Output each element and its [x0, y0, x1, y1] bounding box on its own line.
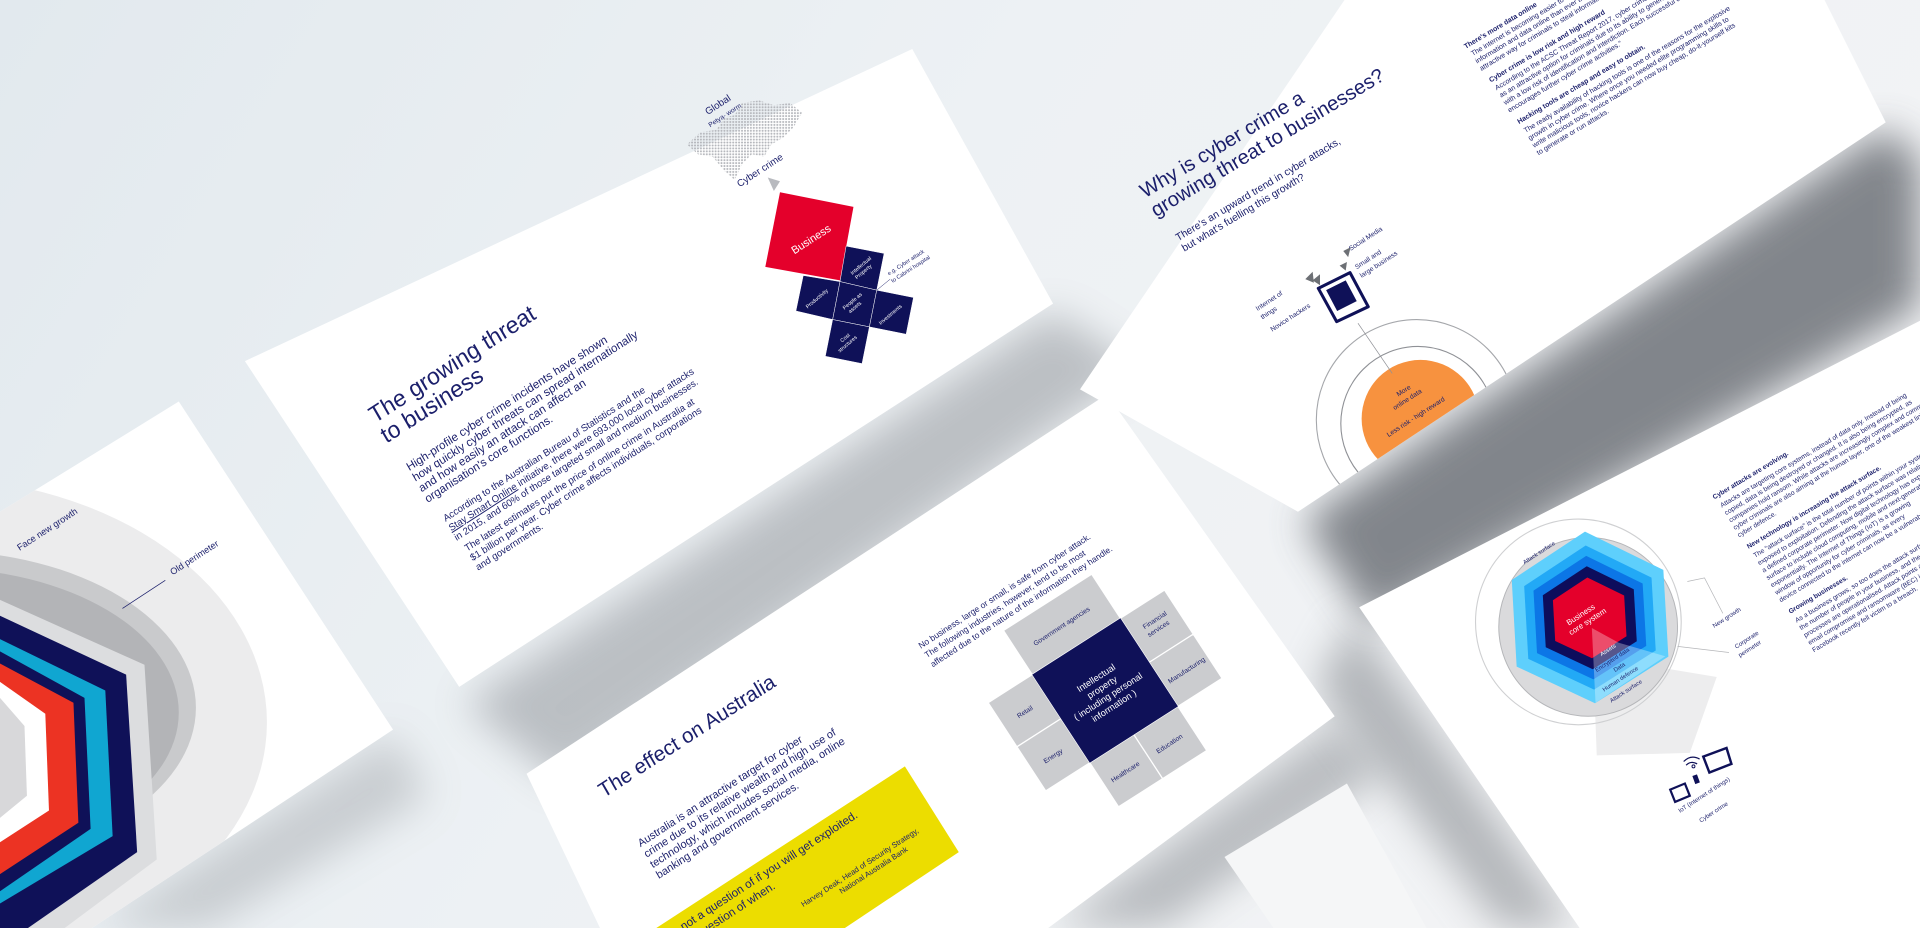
diagram: business cross: People as [842, 292, 864, 311]
callout: quote: National Australia Bank [838, 845, 909, 896]
text: industries intro: The following industries, however, tend to be most [922, 548, 1088, 660]
diagram: hexagon: Human defence [1602, 666, 1640, 693]
diagram: business cross: assets [848, 300, 863, 315]
labels [1255, 226, 1400, 333]
diagram: business cross: Cost [839, 332, 852, 344]
icon: devices: IoT (Internet of things) [1677, 776, 1731, 815]
icon: devices [1670, 748, 1731, 824]
panel: left hexagon slide [0, 402, 393, 928]
diagram: hexagon: Business [1565, 602, 1597, 627]
title and body: organisation's core functions. [423, 412, 555, 506]
diagram: business cross: Business [789, 222, 834, 257]
diagram: business cross [765, 192, 932, 364]
diagram: industries: Intellectual [1075, 662, 1117, 694]
diagram: hexagon: perimeter [1737, 639, 1763, 659]
diagram: industries: Retail [1016, 705, 1035, 720]
diagram: business cross: Property [854, 263, 874, 281]
title and body: crime due to its relative wealth and high use of [642, 726, 839, 860]
title and body: According to the Australian Bureau of Statistics and the [442, 385, 647, 524]
diagram: hexagon: Data [1613, 662, 1627, 674]
diagram: hexagon: Attack surface [1609, 679, 1644, 704]
diagram: industries: ( including personal [1072, 671, 1144, 722]
right text column [1712, 371, 1920, 659]
right text column: Cyber crime is low risk and high reward [1488, 8, 1607, 84]
title and body: technology, which includes social media, online [648, 735, 847, 871]
diagram: industries: Government agencies [1033, 606, 1092, 648]
title and body: and how easily an attack can affect an [416, 376, 588, 495]
map: global: Petya- worm [707, 102, 743, 129]
title and body: in 2015, and 60% of those targeted small and medium businesses. [453, 377, 700, 544]
right text column: write malicious tools, novice hackers can now buy cheap, do-it-yourself kits [1530, 21, 1737, 150]
label: old perimeter: Old perimeter [168, 538, 220, 577]
panel: the growing threat to business [245, 49, 1053, 687]
diagram: target circles: online data [1392, 388, 1424, 412]
callout: quote [656, 766, 959, 928]
diagram: industries [988, 574, 1222, 807]
diagram: target circles [1316, 319, 1506, 484]
title and body: to business [376, 361, 488, 448]
right text column: encourages further cyber crime activities." [1507, 39, 1624, 114]
map: global: Cyber crime [735, 152, 785, 190]
labels: things [1260, 305, 1279, 321]
diagram: hexagon: core system [1567, 606, 1608, 637]
diagram: industries: Financial [1142, 610, 1169, 631]
title and body [364, 241, 720, 582]
title [1136, 45, 1409, 258]
right text column: copied, data is being destroyed or changed. It is also being encrypted, as [1724, 399, 1914, 517]
diagram: hexagon: Assets [1599, 643, 1618, 658]
right text column: New technology is increasing the attack surface. [1746, 465, 1883, 551]
label: face new growth: Face new growth [15, 506, 79, 553]
diagram: target circles: Less risk - high reward [1386, 396, 1447, 439]
diagram: industries: information ) [1090, 688, 1138, 724]
title: but what's fuelling this growth? [1180, 172, 1307, 254]
diagram: business cross: structures [837, 335, 859, 354]
title: growing threat to businesses? [1147, 65, 1388, 222]
right text column: to generate or run attacks. [1535, 107, 1610, 157]
right text column: There's more data online [1463, 1, 1538, 51]
diagram: business cross: e.g. Cyber attack [887, 249, 926, 277]
right text column: exponentially. The Internet of Things (IoT) is a growing [1770, 500, 1912, 589]
title and body: banking and government services. [654, 780, 801, 882]
title and body: $1 billion per year. Cyber crime affects individuals, corporations [469, 405, 704, 564]
callout: quote: Harvey Deak, Head of Security Strategy, [799, 826, 920, 909]
diagram: target circles: More [1396, 384, 1413, 398]
panel: small bottom slide [1224, 784, 1427, 928]
diagram: industries: Education [1155, 733, 1184, 755]
diagram: hexagon: Encrypted data [1595, 647, 1632, 674]
text: industries intro: No business, large or small, is safe from cyber attack. [916, 531, 1092, 651]
right text column: Attacks are targeting core systems, instead of data only. Instead of being [1719, 392, 1908, 510]
panel: attack surface hexagon [1359, 321, 1920, 928]
labels: Internet of [1255, 290, 1284, 313]
title and body: The latest estimates put the price of online crime in Australia at [463, 397, 697, 554]
diagram: business cross: Intellectual [850, 256, 873, 276]
labels: large business [1359, 250, 1400, 280]
diagram: hexagon: Attack surface [1522, 541, 1557, 566]
right text column: Cyber attacks are evolving. [1712, 450, 1790, 501]
map: global [687, 93, 802, 191]
labels: Novice hackers [1270, 302, 1312, 333]
diagram: industries: Energy [1043, 747, 1065, 765]
title and body: Australia is an attractive target for cyber [636, 734, 805, 850]
diagram: hexagon [1476, 519, 1763, 725]
diagram: hexagon: New growth [1712, 606, 1742, 630]
diagram: industries: services [1147, 619, 1172, 639]
title and body: The effect on Australia [595, 670, 780, 803]
labels: Social Media [1348, 226, 1384, 253]
diagram: industries: property [1085, 674, 1119, 701]
diagram: industries: Manufacturing [1167, 656, 1207, 685]
title and body: how quickly cyber threats can spread internationally [410, 328, 640, 484]
right text column [1463, 0, 1745, 162]
title: There's an upward trend in cyber attacks, [1174, 136, 1343, 244]
icon: phone [1305, 247, 1368, 322]
icon: devices: Cyber crime [1698, 800, 1730, 824]
right text column: The ready availability of hacking tools is one of the reasons for the explosive [1523, 4, 1732, 135]
title and body: The growing threat [364, 300, 540, 428]
text: industries intro: affected due to the nature of the information they handle. [928, 544, 1114, 669]
title and body [595, 653, 853, 886]
title and body: and governments. [474, 521, 545, 573]
panel: why is cyber crime a growing threat [1080, 0, 1886, 520]
right text column: growth in cyber crime. Where once you needed elite programming skills to [1527, 15, 1730, 142]
labels: Small and [1354, 249, 1383, 271]
right text column: Growing businesses. [1788, 575, 1849, 616]
diagram: industries: Healthcare [1110, 761, 1141, 784]
diagram: hexagon: Corporate [1734, 630, 1761, 651]
right text column: window of opportunity for cyber criminals, as every [1773, 513, 1907, 597]
title: Why is cyber crime a [1136, 87, 1309, 203]
diagram: business cross: Investments [878, 303, 904, 326]
diagram: business cross: to Cabrini hospital [890, 255, 932, 284]
panel: the effect on Australia [527, 394, 1335, 928]
title and body: High-profile cyber crime incidents have shown [404, 333, 610, 474]
diagram: business cross: Productivity [805, 288, 830, 310]
title and body: Stay Smart Online initiative, there were 693,000 local cyber attacks [447, 366, 696, 534]
right text column: Facebook recently fell victim to a breach. [1811, 585, 1919, 654]
right text column: cyber defence. [1737, 510, 1778, 539]
right text column: Hacking tools are cheap and easy to obtain. [1516, 43, 1647, 126]
map: global: Global [703, 93, 733, 118]
